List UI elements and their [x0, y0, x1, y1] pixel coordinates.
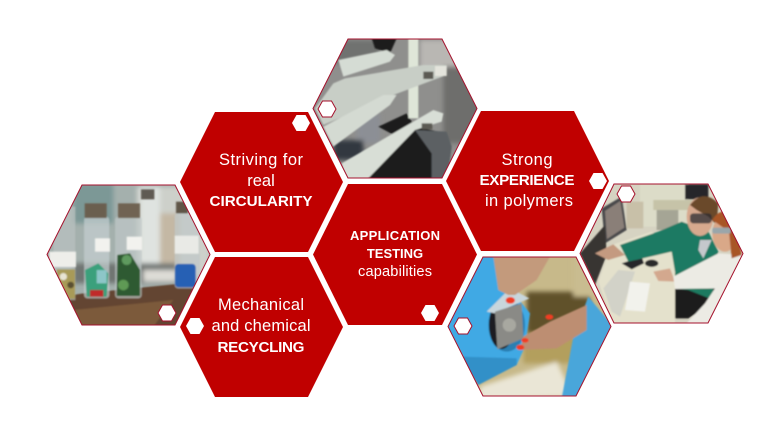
heading: strong experience in polymers: EXPERIENCE	[480, 172, 574, 189]
icon: white hexagon marker	[186, 318, 204, 334]
heading: strong experience in polymers	[480, 151, 574, 210]
hexagon infographic	[46, 38, 744, 397]
icon: white hexagon marker	[292, 115, 310, 131]
heading: mechanical and chemical recycling	[212, 296, 310, 356]
panel: application testing capabilities	[313, 184, 477, 325]
heading: striving for real circularity: Striving for	[219, 151, 304, 169]
icon: white hexagon marker	[421, 305, 439, 321]
icon: white hexagon marker	[454, 318, 472, 334]
heading: application testing capabilities: TESTING	[367, 246, 423, 261]
icon: white hexagon marker	[617, 186, 635, 202]
icon: white hexagon marker	[158, 305, 176, 321]
icon: white hexagon marker	[318, 101, 336, 117]
heading: striving for real circularity	[210, 151, 312, 210]
heading: striving for real circularity: real	[247, 172, 275, 190]
panel: photo of tensile testing arms	[312, 38, 478, 178]
heading: application testing capabilities: APPLICATION	[350, 228, 440, 243]
panel: photo of two scientists at a computer	[580, 184, 744, 324]
heading: strong experience in polymers: in polymers	[485, 192, 573, 210]
heading: mechanical and chemical recycling: RECYCLING	[218, 339, 304, 356]
panel: photo of plastic sample bottles	[46, 184, 210, 326]
heading: strong experience in polymers: Strong	[502, 151, 552, 169]
panel: mechanical and chemical recycling	[180, 257, 343, 397]
heading: mechanical and chemical recycling: Mechanical	[218, 296, 304, 314]
icon: white hexagon marker	[589, 173, 607, 189]
heading: application testing capabilities: capabilities	[358, 264, 432, 280]
heading: application testing capabilities	[350, 228, 440, 280]
heading: striving for real circularity: CIRCULARITY	[210, 193, 312, 210]
panel: strong experience in polymers	[446, 111, 609, 251]
panel: photo of hands placing sample in blue instrument	[448, 256, 612, 396]
heading: mechanical and chemical recycling: and chemical	[212, 317, 310, 335]
panel: striving for real circularity	[180, 112, 343, 252]
